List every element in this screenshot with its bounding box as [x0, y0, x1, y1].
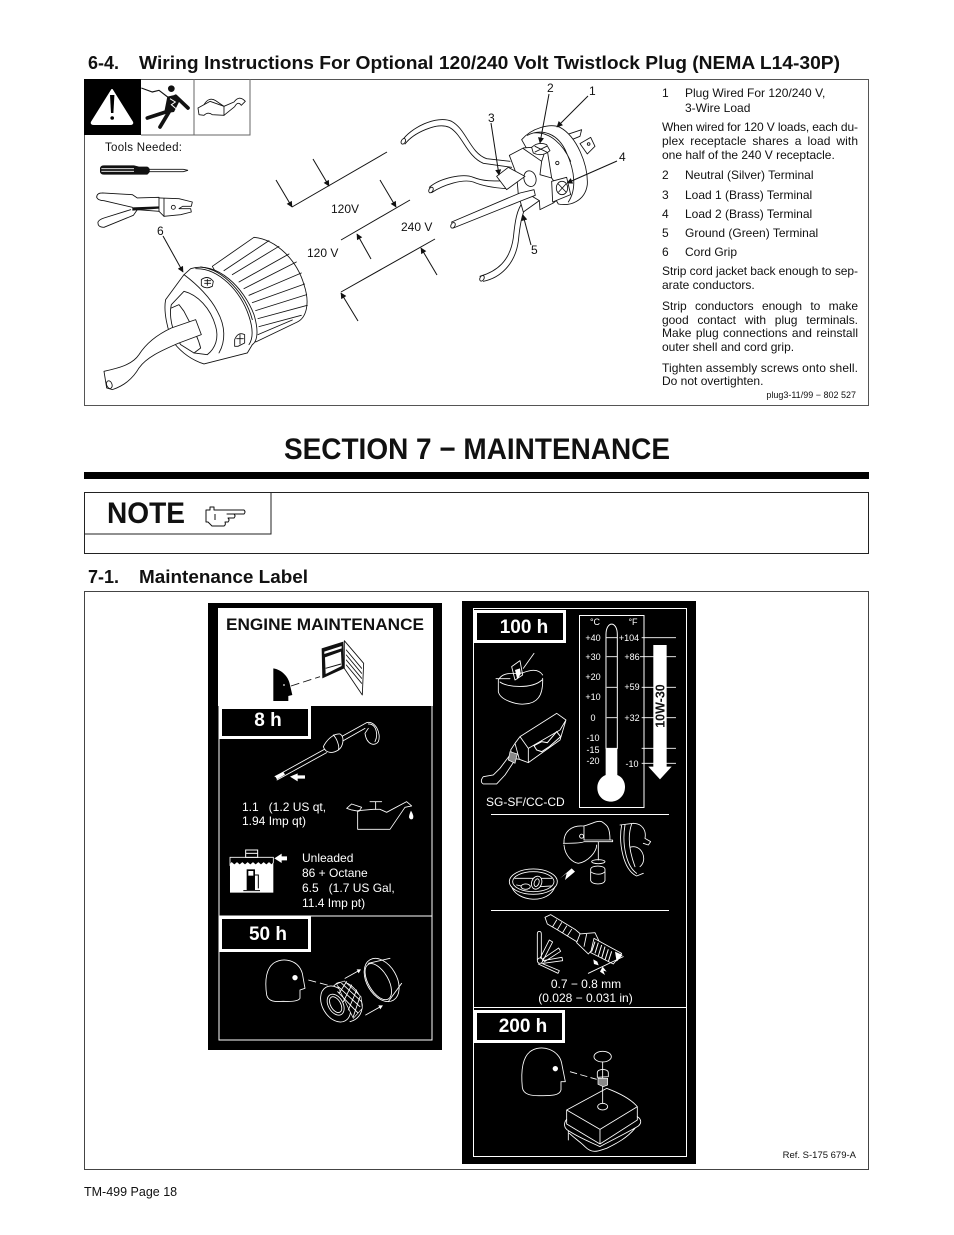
icon: electric shock: [141, 85, 188, 127]
dimension labels: 120 V: [307, 246, 338, 260]
heading: section 6-4: Wiring Instructions For Optional 120/240 Volt Twistlock Plug (NEMA L14-30P): [139, 53, 840, 73]
chart: oil temperature thermometer: -10: [625, 759, 639, 769]
icon: spark plug and feeler gauge: [537, 915, 623, 975]
text block: wiring key and instructions: Do not overtighten.: [662, 374, 763, 388]
chart: oil temperature thermometer: °F: [628, 617, 638, 627]
icon frame lines: [141, 79, 250, 135]
badge: 8 h: 8 h: [254, 710, 282, 731]
text: fuel specification: 11.4 Imp pt): [302, 896, 365, 910]
text block: wiring key and instructions: Cord Grip: [685, 245, 737, 259]
text: fuel specification: 86 + Octane: [302, 866, 368, 880]
chart: oil temperature thermometer: +30: [585, 652, 601, 662]
text block: wiring key and instructions: one half of the 240 V receptacle.: [662, 148, 835, 162]
reference code: Ref. S-175 679-A: [783, 1150, 857, 1161]
chart: oil temperature thermometer: +86: [624, 652, 640, 662]
callout numbers and leader arrows: 6: [157, 224, 164, 238]
chart: oil temperature thermometer: +104: [619, 633, 639, 643]
text block: wiring key and instructions: 1: [662, 86, 669, 100]
chart: oil temperature thermometer: 10W-30: [654, 684, 668, 728]
text: spark plug gap: 0.7 − 0.8 mm: [551, 977, 621, 991]
panel: wiring instructions: [84, 79, 868, 406]
chart: oil temperature thermometer: -20: [586, 756, 600, 766]
strip length dimension lines and arrows: [276, 152, 437, 321]
icon: oil filter and drain: [509, 821, 651, 899]
dimension labels: [307, 202, 432, 260]
text block: wiring key and instructions: 6: [662, 245, 669, 259]
label: engine maintenance (left): [208, 603, 442, 1050]
text block: wiring key and instructions: Tighten assembly screws onto shell.: [662, 361, 858, 375]
icon: oil bottle: [481, 713, 566, 784]
text: oil capacity: 1.94 Imp qt): [242, 814, 306, 828]
dimension labels: 120V: [331, 202, 359, 216]
icon: safety glasses: [198, 98, 245, 115]
icon: dipstick: [275, 722, 379, 781]
text block: wiring key and instructions: Ground (Green) Terminal: [685, 226, 818, 240]
callout numbers and leader arrows: 3: [488, 111, 495, 125]
illustration: wiring terminals and conductors: [400, 120, 595, 282]
text block: wiring key and instructions: plex receptacle shares a load with: [662, 134, 858, 148]
callout numbers and leader arrows: 1: [589, 84, 596, 98]
footer: page number: TM-499 Page 18: [84, 1185, 177, 1199]
text block: wiring key and instructions: Plug Wired For 120/240 V,: [685, 86, 825, 100]
icon: oil can: [347, 802, 413, 829]
icon: screwdriver: [100, 165, 188, 175]
text: oil grade: SG-SF/CC-CD: [486, 795, 565, 809]
label: engine maintenance (right): [462, 601, 696, 1164]
label: tools needed: Tools Needed:: [105, 142, 182, 154]
illustration: twistlock plug shell and cord: [104, 237, 307, 390]
text block: wiring key and instructions: 5: [662, 226, 669, 240]
text: fuel specification: 6.5 (1.7 US Gal,: [302, 881, 395, 895]
text: oil capacity: 1.1 (1.2 US qt,: [242, 800, 326, 814]
chart: oil temperature thermometer: +32: [624, 713, 640, 723]
heading: section 6-4: 6-4.: [88, 53, 119, 73]
text: spark plug gap: [538, 977, 633, 1005]
badge: 200 h: [476, 1012, 564, 1042]
chart: oil temperature thermometer: +40: [585, 633, 601, 643]
panel: note box: [84, 492, 868, 554]
badge: 8 h: [220, 708, 310, 738]
text block: wiring key and instructions: When wired for 120 V loads, each du-: [662, 120, 858, 134]
badge: 100 h: [476, 612, 564, 642]
chart: oil temperature thermometer: +59: [624, 682, 640, 692]
icon: pointing hand: [206, 507, 245, 526]
heading: 7-1 maintenance label: 7-1.: [88, 567, 119, 587]
chart: oil temperature thermometer: [580, 616, 676, 808]
text block: wiring key and instructions: 2: [662, 168, 669, 182]
callout numbers and leader arrows: [157, 81, 626, 272]
dimension labels: 240 V: [401, 220, 432, 234]
section rule: [84, 472, 869, 479]
icon: read manual: [273, 641, 364, 701]
text block: wiring key and instructions: Load 1 (Brass) Terminal: [685, 188, 812, 202]
text block: wiring key and instructions: 3-Wire Load: [685, 101, 750, 115]
text block: wiring key and instructions: Load 2 (Brass) Terminal: [685, 207, 812, 221]
badge: 200 h: 200 h: [499, 1016, 547, 1037]
chart: oil temperature thermometer: -10: [586, 733, 600, 743]
icon: warning triangle: [84, 79, 141, 135]
text block: wiring key and instructions: Make plug connections and reinstall: [662, 326, 858, 340]
text: fuel specification: Unleaded: [302, 851, 353, 865]
chart: oil temperature thermometer: -15: [586, 745, 600, 755]
text block: wiring key and instructions: arate conductors.: [662, 278, 755, 292]
chart: oil temperature thermometer: °C: [590, 617, 601, 627]
text block: wiring key and instructions: Neutral (Silver) Terminal: [685, 168, 813, 182]
heading: engine maintenance: ENGINE MAINTENANCE: [226, 615, 424, 634]
chart: oil temperature thermometer: +10: [585, 692, 601, 702]
text block: wiring key and instructions: 3: [662, 188, 669, 202]
text: oil capacity: [242, 800, 326, 828]
callout numbers and leader arrows: 2: [547, 81, 554, 95]
badge: 50 h: [220, 918, 310, 950]
chart: oil temperature thermometer: 0: [590, 713, 596, 723]
icon: head and fuel filter: [522, 1048, 641, 1151]
text: fuel specification: [302, 851, 395, 910]
text block: wiring key and instructions: outer shell and cord grip.: [662, 340, 794, 354]
text: spark plug gap: (0.028 − 0.031 in): [538, 991, 633, 1005]
callout numbers and leader arrows: 5: [531, 243, 538, 257]
icon: crimping pliers: [97, 193, 192, 227]
title: section 7 maintenance: SECTION 7 − MAINTENANCE: [284, 433, 670, 466]
panel: maintenance label: [84, 592, 868, 1170]
heading: 7-1 maintenance label: Maintenance Label: [139, 567, 308, 587]
text block: wiring key and instructions: Strip conductors enough to make: [662, 299, 858, 313]
icon: fuel tank: [230, 850, 287, 893]
text block: wiring key and instructions: 4: [662, 207, 669, 221]
text block: wiring key and instructions: [662, 86, 858, 400]
icon: oil fill cap: [496, 653, 543, 704]
badge: 50 h: 50 h: [249, 924, 287, 945]
chart: oil temperature thermometer: +20: [585, 672, 601, 682]
icon: head and air filter: [266, 952, 406, 1027]
callout numbers and leader arrows: 4: [619, 150, 626, 164]
text block: wiring key and instructions: Strip cord jacket back enough to sep-: [662, 264, 858, 278]
heading: note: NOTE: [107, 497, 185, 530]
text block: wiring key and instructions: plug3-11/99 − 802 527: [766, 390, 856, 400]
text block: wiring key and instructions: good contact with plug terminals.: [662, 313, 858, 327]
badge: 100 h: 100 h: [500, 617, 548, 638]
